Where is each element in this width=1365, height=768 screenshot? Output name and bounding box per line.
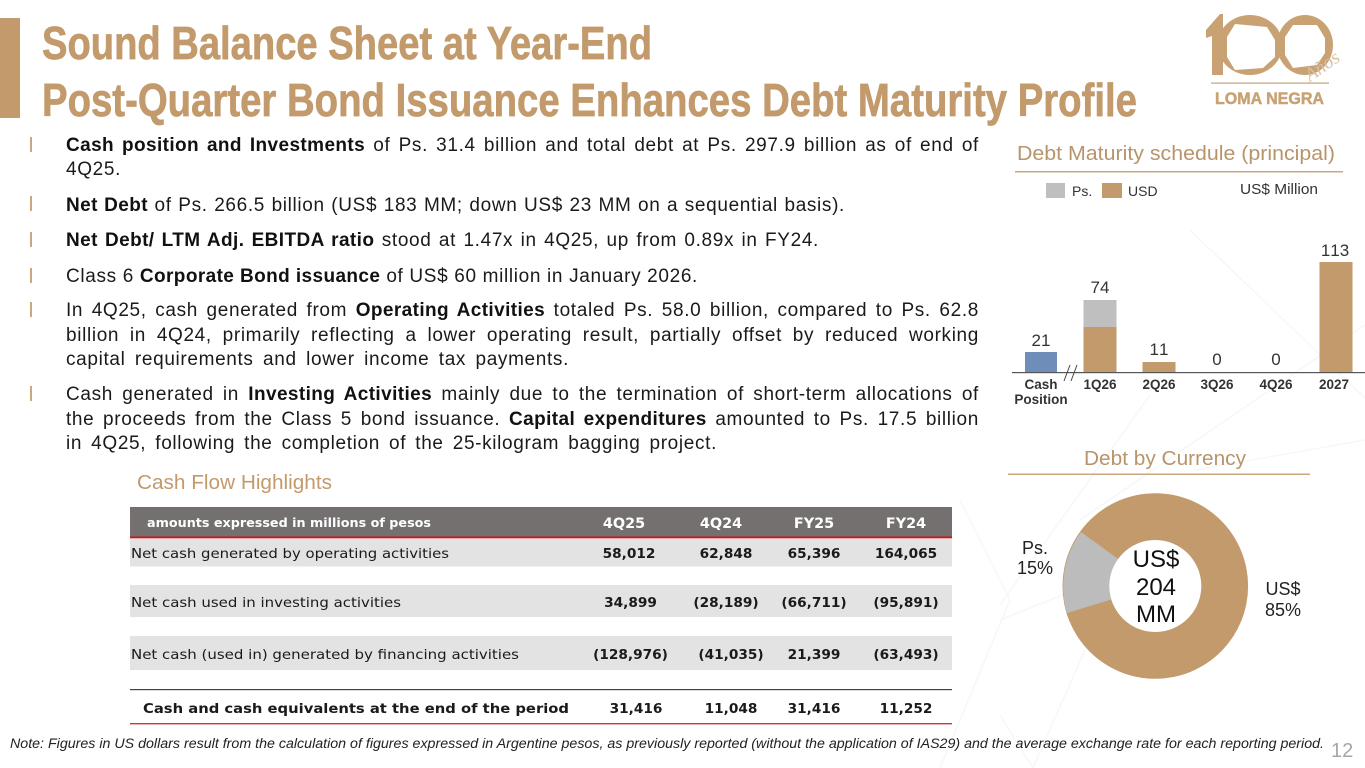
section heading: debt by currency: Debt by Currency [1084, 448, 1246, 470]
bar chart: debt maturity: 0 [1212, 350, 1222, 369]
bullet list [30, 135, 979, 454]
logo: Loma Negra 100 años: Años [1299, 47, 1344, 87]
logo: Loma Negra 100 años: LOMA NEGRA [1215, 89, 1324, 108]
title: Post-Quarter Bond Issuance Enhances Debt Maturity Profile [42, 74, 1137, 126]
bar chart: debt maturity: Position [1014, 392, 1068, 407]
bar chart: debt maturity: 1Q26 [1083, 377, 1117, 392]
bullet list: Net Debt/ LTM Adj. EBITDA ratio stood at 1.47x in 4Q25, up from 0.89x in FY24. [66, 230, 819, 251]
row: financing activities: Net cash (used in) generated by financing activities [131, 648, 519, 663]
bar chart: debt maturity: 3Q26 [1200, 377, 1234, 392]
section heading: cash flow highlights: Cash Flow Highlights [137, 472, 332, 494]
footnote: Note: Figures in US dollars result from the calculation of figures expressed in Argentine pesos, as previously reported (without the application of IAS29) and the average exchange rate for each reporting period. [10, 736, 1324, 751]
row: financing activities [130, 636, 952, 670]
bullet list: Cash position and Investments of Ps. 31.4 billion and total debt at Ps. 297.9 billion as of end of [66, 135, 979, 156]
donut chart: debt by currency [1017, 493, 1301, 679]
row: operating activities: 65,396 [788, 546, 840, 562]
legend [1046, 183, 1158, 199]
row: investing activities: (66,711) [781, 595, 847, 611]
donut chart: debt by currency: US$ [1265, 579, 1301, 599]
row: operating activities: 58,012 [603, 546, 655, 562]
page number: 12 [1331, 740, 1353, 762]
title: Sound Balance Sheet at Year-End [42, 17, 652, 69]
bar chart: debt maturity: 0 [1271, 350, 1281, 369]
bar chart: debt maturity [1012, 241, 1365, 407]
row: operating activities: 62,848 [700, 546, 752, 562]
row: investing activities: (28,189) [693, 595, 759, 611]
bullet list: Net Debt of Ps. 266.5 billion (US$ 183 MM; down US$ 23 MM on a sequential basis). [66, 195, 845, 216]
row: cash at end of period [130, 689, 952, 724]
bar chart: debt maturity: Cash [1024, 377, 1058, 392]
bar chart: debt maturity: 74 [1091, 278, 1109, 297]
bullet list: in 4Q25, following the completion of the 25-kilogram bagging project. [66, 433, 717, 454]
row: investing activities [130, 585, 952, 617]
legend: Ps. [1072, 183, 1092, 199]
bar chart: debt maturity: 11 [1150, 340, 1168, 359]
unit label: US$ Million [1240, 182, 1318, 198]
logo: Loma Negra 100 años [1206, 14, 1344, 108]
bullet list: the proceeds from the Class 5 bond issuance. Capital expenditures amounted to Ps. 17.5 billion [66, 409, 979, 430]
donut chart: debt by currency: 15% [1017, 558, 1053, 578]
donut chart: debt by currency: US$ [1133, 546, 1179, 573]
bar chart: debt maturity: 4Q26 [1259, 377, 1293, 392]
bar chart: debt maturity: 113 [1321, 241, 1349, 260]
table header [130, 507, 952, 539]
row: cash at end of period: 31,416 [610, 701, 662, 717]
bullet list: Class 6 Corporate Bond issuance of US$ 60 million in January 2026. [66, 266, 698, 287]
row: cash at end of period: 11,252 [880, 701, 932, 717]
row: investing activities: Net cash used in investing activities [131, 596, 401, 611]
row: financing activities: (128,976) [593, 647, 668, 663]
bullet list: Cash generated in Investing Activities mainly due to the termination of short-term allocations of [66, 384, 979, 405]
legend: USD [1128, 183, 1158, 199]
row: cash at end of period: 11,048 [705, 701, 757, 717]
row: investing activities: 34,899 [604, 595, 657, 611]
row: financing activities: (41,035) [698, 647, 764, 663]
bar chart: debt maturity: 21 [1032, 331, 1050, 350]
accent bar [0, 18, 20, 118]
bullet list: billion in 4Q24, primarily reflecting a lower operating result, partially offset by reduced working [66, 325, 979, 346]
title [42, 17, 1137, 126]
table: cash flow highlights [130, 507, 952, 724]
row: operating activities [130, 539, 952, 566]
bullet list: capital requirements and lower income tax payments. [66, 349, 569, 370]
row: cash at end of period: 31,416 [788, 701, 840, 717]
table header: FY24 [886, 516, 926, 532]
row: financing activities: 21,399 [788, 647, 840, 663]
table header: amounts expressed in millions of pesos [147, 515, 431, 530]
donut chart: debt by currency: 204 [1136, 574, 1176, 601]
table header: 4Q25 [603, 516, 645, 532]
row: operating activities: 164,065 [875, 546, 937, 562]
bar chart: debt maturity: 2027 [1319, 377, 1349, 392]
table header: 4Q24 [700, 516, 742, 532]
bullet list: 4Q25. [66, 159, 121, 180]
row: investing activities: (95,891) [873, 595, 939, 611]
bar chart: debt maturity: 2Q26 [1142, 377, 1176, 392]
donut chart: debt by currency: 85% [1265, 600, 1301, 620]
bullet list: In 4Q25, cash generated from Operating Activities totaled Ps. 58.0 billion, compared to Ps. 62.8 [66, 300, 979, 321]
row: operating activities: Net cash generated by operating activities [131, 547, 449, 562]
donut chart: debt by currency: Ps. [1022, 538, 1048, 558]
donut chart: debt by currency: MM [1136, 601, 1176, 628]
section heading: debt maturity: Debt Maturity schedule (principal) [1017, 142, 1335, 165]
row: cash at end of period: Cash and cash equivalents at the end of the period [143, 702, 569, 717]
row: financing activities: (63,493) [873, 647, 939, 663]
table header: FY25 [794, 516, 834, 532]
